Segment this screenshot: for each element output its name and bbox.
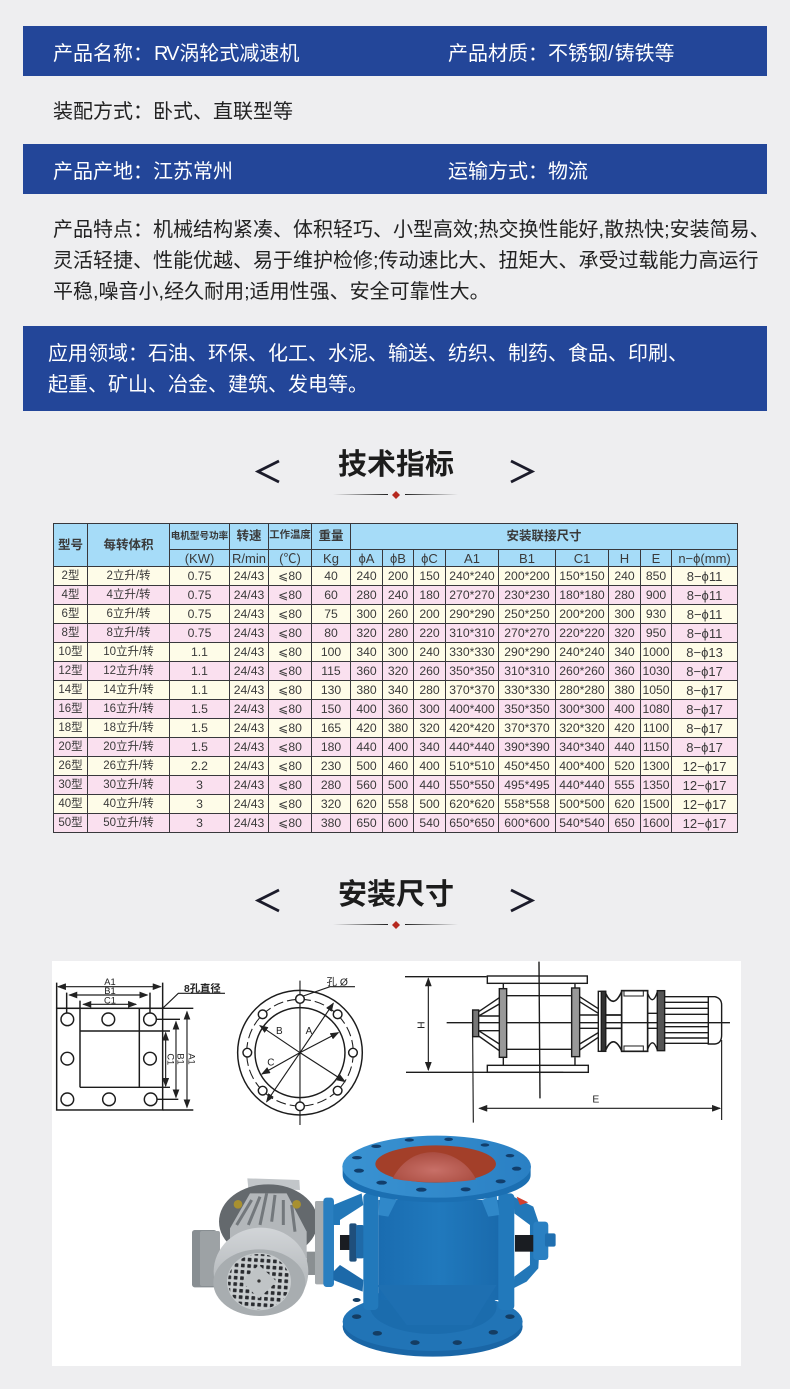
- specifications table: 340: [419, 740, 440, 754]
- specifications table: 165: [321, 721, 341, 735]
- specifications table: 8−ϕ17: [686, 740, 723, 754]
- specifications table: 24/43: [234, 626, 264, 640]
- specifications table: 558*558: [504, 797, 550, 811]
- specifications table: 10立升/转: [103, 646, 154, 658]
- specifications table: ⩽80: [278, 759, 302, 773]
- diagram: square flange dimensions: [57, 977, 225, 1110]
- specifications table: 200: [388, 569, 408, 583]
- specifications table: 1030: [642, 664, 670, 678]
- product origin: 产品产地：江苏常州: [53, 161, 233, 183]
- specifications table: B1: [519, 550, 535, 566]
- specifications table: ⩽80: [278, 607, 302, 621]
- specifications table: 200*200: [559, 607, 605, 621]
- specifications table: 850: [646, 569, 666, 583]
- specifications table: 24/43: [234, 683, 264, 697]
- specifications table: ⩽80: [278, 702, 302, 716]
- motor: [192, 1178, 320, 1316]
- application fields text: 起重、矿山、冶金、建筑、发电等。: [48, 374, 368, 396]
- specifications table: ⩽80: [278, 588, 302, 602]
- specifications table: 18立升/转: [103, 722, 154, 734]
- specifications table: 1.5: [191, 702, 208, 716]
- specifications table: 930: [646, 607, 666, 621]
- specifications table: 240: [419, 645, 440, 659]
- band: application fields: [23, 326, 767, 411]
- specifications table: 260*260: [559, 664, 605, 678]
- diagram: side elevation with H and E dimensions: E: [592, 1094, 599, 1105]
- specifications table: 电机型号功率: [171, 531, 228, 542]
- specifications table: ⩽80: [278, 816, 302, 830]
- specifications table: 2立升/转: [106, 570, 151, 582]
- specifications table: 2.2: [191, 759, 208, 773]
- specifications table: 550*550: [449, 778, 495, 792]
- specifications table: 1.5: [191, 740, 208, 754]
- specifications table: 1.1: [191, 683, 208, 697]
- diagram: side elevation with H and E dimensions: [405, 962, 730, 1123]
- heading: technical specifications: 技术指标: [338, 449, 454, 481]
- specifications table: 150*150: [559, 569, 605, 583]
- specifications table: 540*540: [559, 816, 605, 830]
- band: origin and shipping: [23, 144, 767, 194]
- specifications table: 650: [356, 816, 377, 830]
- specifications table: 260: [419, 664, 440, 678]
- specifications table: 3: [196, 778, 203, 792]
- specifications table: 150: [321, 702, 341, 716]
- specifications table: 12−ϕ17: [683, 778, 726, 792]
- specifications table: 12−ϕ17: [683, 796, 726, 812]
- specifications table: 280: [321, 778, 341, 792]
- specifications table: 转速: [236, 529, 262, 543]
- diagram: circular flange dimensions: A: [306, 1026, 313, 1037]
- specifications table: 230: [321, 759, 341, 773]
- specifications table: 270*270: [504, 626, 550, 640]
- product name: 产品名称：RV涡轮式减速机: [53, 43, 299, 65]
- specifications table: 0.75: [188, 569, 211, 583]
- product material: 产品材质：不锈钢/铸铁等: [448, 43, 675, 65]
- specifications table: 14型: [58, 684, 83, 696]
- specifications table: 440: [356, 740, 377, 754]
- specifications table: 8−ϕ11: [687, 568, 722, 584]
- specifications table: 400: [388, 740, 408, 754]
- specifications table: Kg: [323, 550, 339, 566]
- specifications table: 8−ϕ17: [686, 682, 723, 698]
- specifications table: 180: [321, 740, 341, 754]
- specifications table: 180: [419, 588, 440, 602]
- specifications table: 460: [388, 759, 408, 773]
- specifications table: 360: [356, 664, 377, 678]
- specifications table: 250*250: [504, 607, 550, 621]
- specifications table: A1: [464, 550, 480, 566]
- specifications table: 600*600: [504, 816, 550, 830]
- specifications table: 500: [388, 778, 408, 792]
- specifications table: 12−ϕ17: [683, 816, 726, 830]
- specifications table: 270*270: [449, 588, 495, 602]
- specifications table: 0.75: [188, 588, 211, 602]
- drive flange and yokes: [315, 1193, 556, 1292]
- specifications table: 300: [419, 702, 440, 716]
- diagram: square flange dimensions: B1: [176, 1053, 186, 1065]
- specifications table: 180*180: [559, 588, 605, 602]
- specifications table: 300: [356, 607, 377, 621]
- specifications table: 540: [419, 816, 440, 830]
- product photo: rotary valve with motor: [192, 1136, 556, 1357]
- bottom flange: [343, 1279, 523, 1357]
- specifications table: 600: [388, 816, 408, 830]
- specifications table: 8−ϕ13: [686, 644, 723, 660]
- specifications table: 16型: [58, 703, 83, 715]
- specifications table: 1.5: [191, 721, 208, 735]
- diagram: square flange dimensions: A1: [186, 1053, 196, 1065]
- specifications table: 200: [419, 607, 440, 621]
- specifications table: 240: [356, 569, 377, 583]
- specifications table: 30立升/转: [103, 779, 154, 791]
- specifications table: 每转体积: [103, 538, 154, 552]
- specifications table: 280: [356, 588, 377, 602]
- specifications table: 300: [614, 607, 635, 621]
- specifications table: 240*240: [449, 569, 495, 583]
- specifications table: 420: [614, 721, 635, 735]
- specifications table: 130: [321, 683, 341, 697]
- specifications table: 26立升/转: [103, 760, 154, 772]
- specifications table: 1500: [642, 797, 670, 811]
- specifications table: 320*320: [559, 721, 605, 735]
- specifications table: 400: [356, 702, 377, 716]
- specifications table: 240*240: [559, 645, 605, 659]
- specifications table: 型号: [58, 538, 83, 552]
- diagram: square flange dimensions: C1: [165, 1053, 175, 1065]
- specifications table: 400*400: [449, 702, 495, 716]
- specifications table: 400: [614, 702, 635, 716]
- specifications table: 1350: [642, 778, 670, 792]
- specifications table: 0.75: [188, 607, 211, 621]
- specifications table: 558: [388, 797, 408, 811]
- specifications table: 280*280: [559, 683, 605, 697]
- specifications table: 350*350: [449, 664, 495, 678]
- specifications table: 620*620: [449, 797, 495, 811]
- specifications table: 390*390: [504, 740, 550, 754]
- specifications table: 8−ϕ17: [686, 702, 723, 716]
- specifications table: 16立升/转: [103, 703, 154, 715]
- top flange: [342, 1136, 531, 1202]
- specifications table: ϕA: [359, 550, 374, 566]
- specifications table: 380: [356, 683, 377, 697]
- heading ornament: technical specifications: [255, 460, 535, 499]
- specifications table: n−ϕ(mm): [678, 550, 731, 566]
- specifications table: 12型: [58, 665, 83, 677]
- diagram: circular flange dimensions: C: [267, 1058, 275, 1069]
- specifications table: 8立升/转: [106, 627, 151, 639]
- white image panel: [52, 961, 741, 1366]
- specifications table: 340*340: [559, 740, 605, 754]
- specifications table: ϕB: [390, 550, 406, 566]
- specifications table: 安装联接尺寸: [507, 529, 582, 543]
- specifications table: 重量: [318, 529, 344, 543]
- specifications table: 4型: [62, 589, 79, 601]
- specifications table: 900: [646, 588, 666, 602]
- application fields text: 应用领域：石油、环保、化工、水泥、输送、纺织、制药、食品、印刷、: [48, 343, 688, 365]
- specifications table: 2型: [62, 570, 79, 582]
- specifications table: 370*370: [449, 683, 495, 697]
- specifications table: 6立升/转: [106, 608, 151, 620]
- specifications table: 400*400: [559, 759, 605, 773]
- specifications table: 440: [419, 778, 440, 792]
- specifications table: 420: [356, 721, 377, 735]
- specifications table: 60: [324, 588, 338, 602]
- specifications table: (KW): [185, 550, 214, 566]
- specifications table: 620: [614, 797, 635, 811]
- specifications table: 1080: [642, 702, 670, 716]
- specifications table: 24/43: [234, 702, 264, 716]
- specifications table: 950: [646, 626, 666, 640]
- specifications table: 24/43: [234, 664, 264, 678]
- band: product name and material: [23, 26, 767, 76]
- specifications table: 8−ϕ11: [687, 606, 722, 622]
- specifications table: 26型: [58, 760, 83, 772]
- specifications table: 320: [321, 797, 341, 811]
- specifications table: 310*310: [449, 626, 495, 640]
- specifications table: ⩽80: [278, 664, 302, 678]
- specifications table: 1150: [643, 740, 669, 754]
- specifications table: 320: [419, 721, 440, 735]
- specifications table: ⩽80: [278, 740, 302, 754]
- specifications table: ⩽80: [278, 645, 302, 659]
- specifications table: ⩽80: [278, 721, 302, 735]
- diagram: side elevation with H and E dimensions: H: [414, 1021, 425, 1029]
- specifications table: 280: [388, 626, 408, 640]
- specifications table: 14立升/转: [103, 684, 154, 696]
- specifications table: 360: [388, 702, 408, 716]
- specifications table: 380: [614, 683, 635, 697]
- specifications table: 40立升/转: [103, 798, 154, 810]
- specifications table: 24/43: [234, 759, 264, 773]
- specifications table: (℃): [279, 550, 301, 566]
- assembly method text: 装配方式：卧式、直联型等: [53, 101, 293, 123]
- specifications table: 3: [196, 797, 203, 811]
- specifications table: 24/43: [234, 721, 264, 735]
- specifications table: ⩽80: [278, 569, 302, 583]
- specifications table: 520: [614, 759, 635, 773]
- specifications table: 555: [614, 778, 635, 792]
- specifications table: 工作温度: [269, 530, 311, 541]
- specifications table: 320: [388, 664, 408, 678]
- specifications table: 290*290: [449, 607, 495, 621]
- specifications table: 40: [324, 569, 338, 583]
- specifications table: 24/43: [234, 816, 264, 830]
- specifications table: H: [620, 550, 629, 566]
- specifications table: 24/43: [234, 778, 264, 792]
- specifications table: 40型: [58, 798, 83, 810]
- specifications table: 650*650: [449, 816, 495, 830]
- specifications table: 350*350: [504, 702, 550, 716]
- specifications table: ⩽80: [278, 626, 302, 640]
- product features text: [53, 218, 770, 303]
- specifications table: 650: [614, 816, 635, 830]
- specifications table: 495*495: [504, 778, 550, 792]
- specifications table: 370*370: [504, 721, 550, 735]
- diagram: circular flange dimensions: B: [276, 1026, 283, 1037]
- specifications table: 1050: [642, 683, 670, 697]
- specifications table: 320: [356, 626, 377, 640]
- diagram: square flange dimensions: C1: [104, 995, 116, 1005]
- shipping method: 运输方式：物流: [448, 161, 588, 183]
- diagram: square flange dimensions: 8孔直径: [184, 982, 221, 995]
- specifications table: ⩽80: [278, 797, 302, 811]
- specifications table: 240: [388, 588, 408, 602]
- specifications table: 75: [324, 607, 338, 621]
- specifications table: 1.1: [191, 664, 208, 678]
- specifications table: 420*420: [449, 721, 495, 735]
- specifications table: 300*300: [559, 702, 605, 716]
- specifications table: 440*440: [449, 740, 495, 754]
- specifications table: 400: [419, 759, 440, 773]
- specifications table: 330*330: [449, 645, 495, 659]
- specifications table: 24/43: [234, 607, 264, 621]
- specifications table: 24/43: [234, 740, 264, 754]
- specifications table: 380: [388, 721, 408, 735]
- product features text: 灵活轻捷、性能优越、易于维护检修;传动速比大、扭矩大、承受过载能力高运行: [53, 250, 759, 272]
- specifications table: 18型: [58, 722, 83, 734]
- specifications table: 0.75: [188, 626, 211, 640]
- specifications table: 510*510: [449, 759, 495, 773]
- specifications table: 1.1: [191, 645, 208, 659]
- diagram: circular flange dimensions: 孔 Ø: [327, 976, 348, 988]
- specifications table: ⩽80: [278, 778, 302, 792]
- specifications table: 1000: [642, 645, 670, 659]
- specifications table: 6型: [62, 608, 79, 620]
- specifications table: E: [652, 550, 660, 566]
- specifications table: 450*450: [504, 759, 550, 773]
- specifications table: 24/43: [234, 645, 264, 659]
- product features text: 平稳,噪音小,经久耐用;适用性强、安全可靠性大。: [53, 281, 490, 303]
- specifications table: 1100: [643, 721, 669, 735]
- specifications table: 280: [614, 588, 635, 602]
- specifications table: 440: [614, 740, 635, 754]
- specifications table: 24/43: [234, 569, 264, 583]
- specifications table: 12立升/转: [103, 665, 154, 677]
- specifications table: R/min: [232, 550, 266, 566]
- specifications table: 500: [356, 759, 377, 773]
- valve body: [363, 1193, 514, 1325]
- specifications table: 50型: [58, 817, 83, 829]
- specifications table: 340: [356, 645, 377, 659]
- specifications table: 8−ϕ11: [687, 588, 722, 602]
- specifications table: 8−ϕ17: [686, 720, 723, 736]
- diagram: square flange dimensions: B1: [104, 986, 116, 996]
- specifications table: 260: [388, 607, 408, 621]
- specifications table: 100: [321, 645, 341, 659]
- specifications table: 290*290: [504, 645, 550, 659]
- application fields text: [48, 342, 688, 396]
- specifications table: 300: [388, 645, 408, 659]
- specifications table: 380: [321, 816, 341, 830]
- specifications table: 440*440: [559, 778, 605, 792]
- specifications table: 12−ϕ17: [683, 758, 726, 774]
- specifications table: 8型: [62, 627, 79, 639]
- specifications table: 500: [419, 797, 440, 811]
- specifications table: 330*330: [504, 683, 550, 697]
- specifications table: 360: [614, 664, 635, 678]
- specifications table: 1600: [642, 816, 670, 830]
- specifications table: 8−ϕ11: [687, 626, 722, 640]
- specifications table: 240: [614, 569, 635, 583]
- specifications table: 200*200: [504, 569, 550, 583]
- heading ornament: installation dimensions: [258, 890, 532, 929]
- specifications table: [53, 523, 738, 833]
- specifications table: 20立升/转: [103, 741, 154, 753]
- diagram: circular flange dimensions: [238, 976, 362, 1125]
- specifications table: 1300: [642, 759, 670, 773]
- specifications table: 4立升/转: [106, 589, 151, 601]
- specifications table: ϕC: [421, 550, 438, 566]
- specifications table: ⩽80: [278, 683, 302, 697]
- specifications table: 500*500: [559, 797, 605, 811]
- heading: installation dimensions: 安装尺寸: [338, 879, 454, 911]
- specifications table: 8−ϕ17: [686, 664, 723, 678]
- specifications table: 280: [419, 683, 440, 697]
- specifications table: 20型: [58, 741, 83, 753]
- specifications table: 220: [419, 626, 440, 640]
- specifications table: 115: [321, 664, 341, 678]
- specifications table: 10型: [58, 646, 83, 658]
- specifications table: 80: [324, 626, 338, 640]
- specifications table: 220*220: [559, 626, 605, 640]
- specifications table: 24/43: [234, 797, 264, 811]
- product features text: 产品特点：机械结构紧凑、体积轻巧、小型高效;热交换性能好,散热快;安装简易、: [53, 219, 770, 241]
- specifications table: 150: [419, 569, 440, 583]
- specifications table: 3: [196, 816, 203, 830]
- specifications table: 620: [356, 797, 377, 811]
- specifications table: 340: [614, 645, 635, 659]
- specifications table: 310*310: [504, 664, 550, 678]
- specifications table: 50立升/转: [103, 817, 154, 829]
- specifications table: 230*230: [504, 588, 550, 602]
- specifications table: 320: [614, 626, 635, 640]
- specifications table: C1: [574, 550, 590, 566]
- specifications table: 340: [388, 683, 408, 697]
- diagram: square flange dimensions: A1: [104, 977, 116, 987]
- specifications table: 24/43: [234, 588, 264, 602]
- specifications table: 560: [356, 778, 377, 792]
- specifications table: 30型: [58, 779, 83, 791]
